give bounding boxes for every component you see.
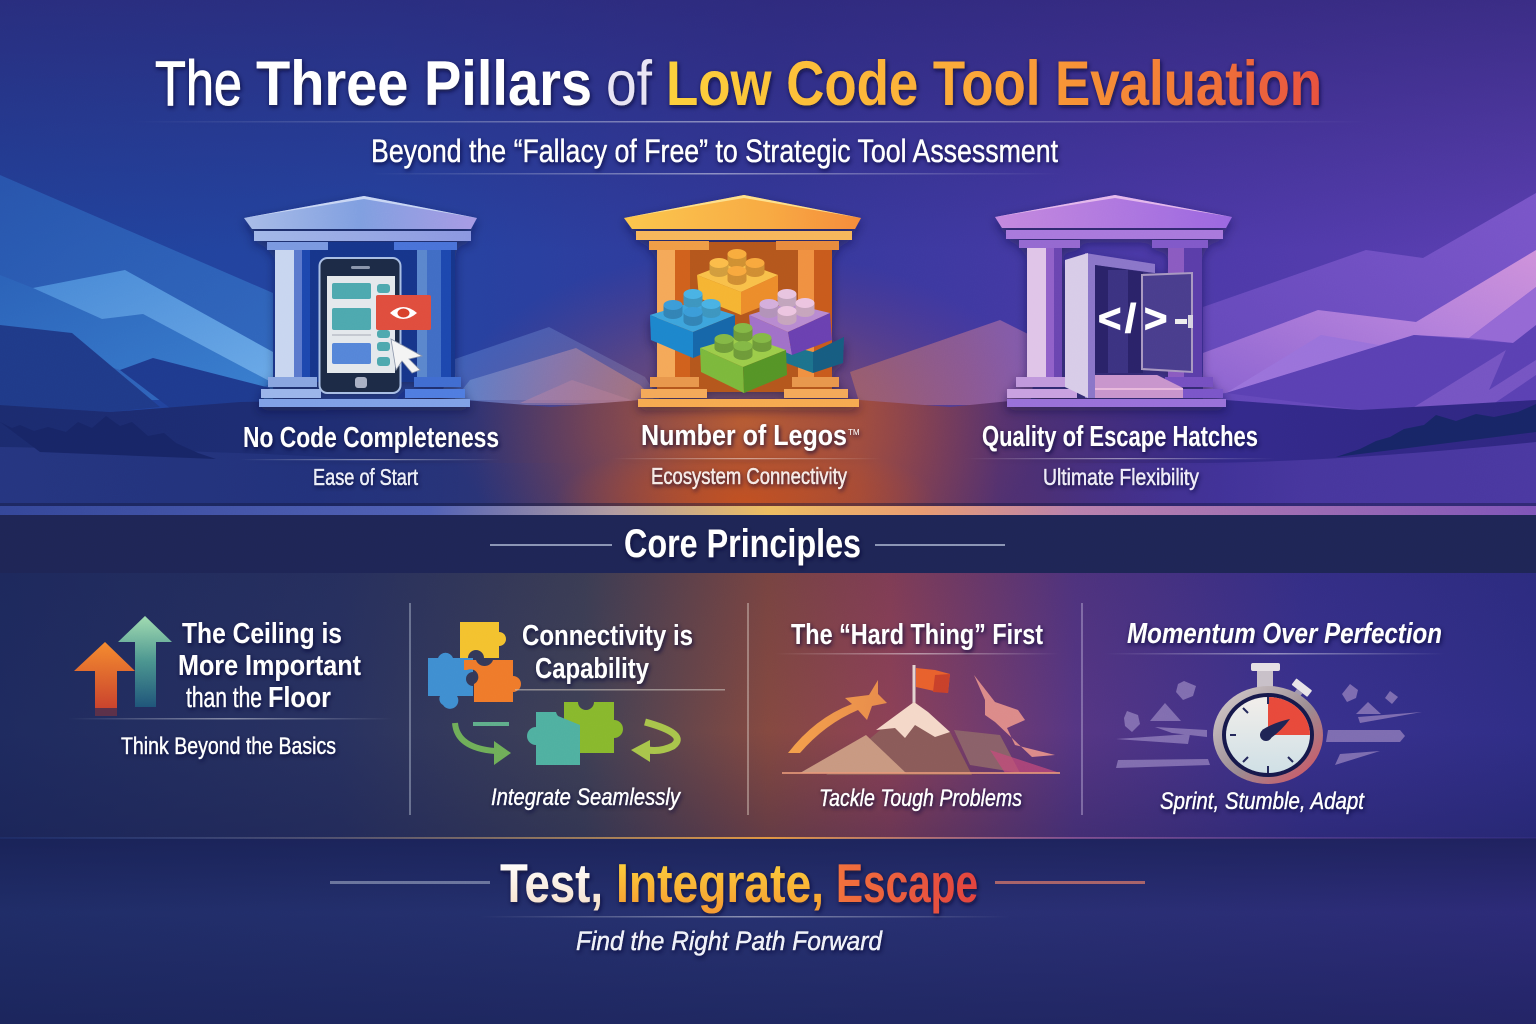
title: Three Pillars: [256, 49, 592, 119]
pillar 2: number of legos temple: [624, 195, 861, 407]
closing headline: test, integrate, escape: Integrate,: [616, 852, 824, 914]
label: no code completeness: No Code Completeness: [243, 422, 499, 454]
label: number of legos: TM: [848, 428, 860, 437]
closing headline: test, integrate, escape: Test,: [500, 852, 603, 914]
caption: Sprint, Stumble, Adapt: [1160, 788, 1365, 815]
pillar 3: quality of escape hatches temple: [995, 195, 1232, 407]
title: of: [606, 49, 652, 119]
principle 1: the ceiling: [68, 616, 393, 760]
label: number of legos: Number of Legos: [641, 420, 847, 452]
icon: blue lego brick: [650, 289, 735, 358]
icon: code brackets: </>: [1098, 297, 1167, 341]
title: Low Code Tool Evaluation: [666, 49, 1322, 119]
icon: cursor arrow: [391, 339, 422, 373]
icon: phone with app screen: [320, 258, 400, 393]
icon: open door frame: [1065, 253, 1192, 398]
closing tagline: Find the Right Path Forward: [576, 926, 883, 956]
principle 3: the hard thing first: [775, 619, 1060, 812]
title: The: [155, 49, 242, 119]
background: closing panel: [0, 837, 1536, 1024]
closing headline: test, integrate, escape: [330, 852, 1145, 918]
heading: [522, 620, 693, 685]
label: no code completeness: [240, 422, 500, 490]
decoration: speed shapes around stopwatch: [1116, 681, 1422, 768]
subtitle: Beyond the “Fallacy of Free” to Strategic Tool Assessment: [371, 133, 1058, 169]
icon: stopwatch: [1213, 663, 1323, 784]
heading: Connectivity is: [522, 620, 693, 652]
heading: More Important: [178, 650, 361, 682]
icon: three interlocking puzzle pieces: [428, 622, 521, 709]
heading: core principles: Core Principles: [624, 522, 861, 566]
label: quality of escape hatches: Ultimate Flexibility: [1043, 464, 1199, 490]
icon: yellow lego brick: [697, 249, 778, 315]
icon: connected puzzle pieces with arrows: [455, 702, 677, 765]
ground: [0, 398, 1536, 516]
heading: Capability: [535, 653, 649, 685]
principle 4: momentum over perfection: [1105, 618, 1445, 815]
icon: rising arrows: [74, 616, 172, 716]
caption: Integrate Seamlessly: [491, 784, 682, 811]
label: quality of escape hatches: Quality of Escape Hatches: [982, 421, 1258, 453]
background: principles panel: [0, 573, 1536, 838]
title: [155, 49, 1322, 119]
background: core principles band: [0, 515, 1536, 573]
heading: Floor: [268, 682, 331, 714]
label: number of legos: [612, 420, 882, 489]
caption: Think Beyond the Basics: [121, 733, 336, 760]
closing headline: test, integrate, escape: Escape: [836, 852, 978, 914]
principle 2: connectivity: [428, 620, 725, 811]
icon: teal lego brick: [786, 337, 844, 373]
background: top pillars area: [0, 0, 1536, 590]
heading: The Ceiling is: [182, 618, 342, 650]
heading: than the: [186, 682, 262, 714]
heading: [178, 618, 361, 714]
icon: green lego brick: [700, 323, 787, 393]
icon: mountain with flag and shooting star: [782, 665, 1060, 775]
pillar 1: no code completeness temple: [244, 196, 477, 407]
label: number of legos: Ecosystem Connectivity: [651, 463, 847, 489]
icon: purple lego brick: [749, 289, 832, 355]
heading: The “Hard Thing” First: [791, 619, 1043, 651]
caption: Tackle Tough Problems: [819, 785, 1022, 812]
label: quality of escape hatches: [965, 421, 1275, 490]
label: no code completeness: Ease of Start: [313, 464, 418, 490]
heading: Momentum Over Perfection: [1127, 618, 1442, 650]
icon: red eye badge: [376, 295, 431, 330]
